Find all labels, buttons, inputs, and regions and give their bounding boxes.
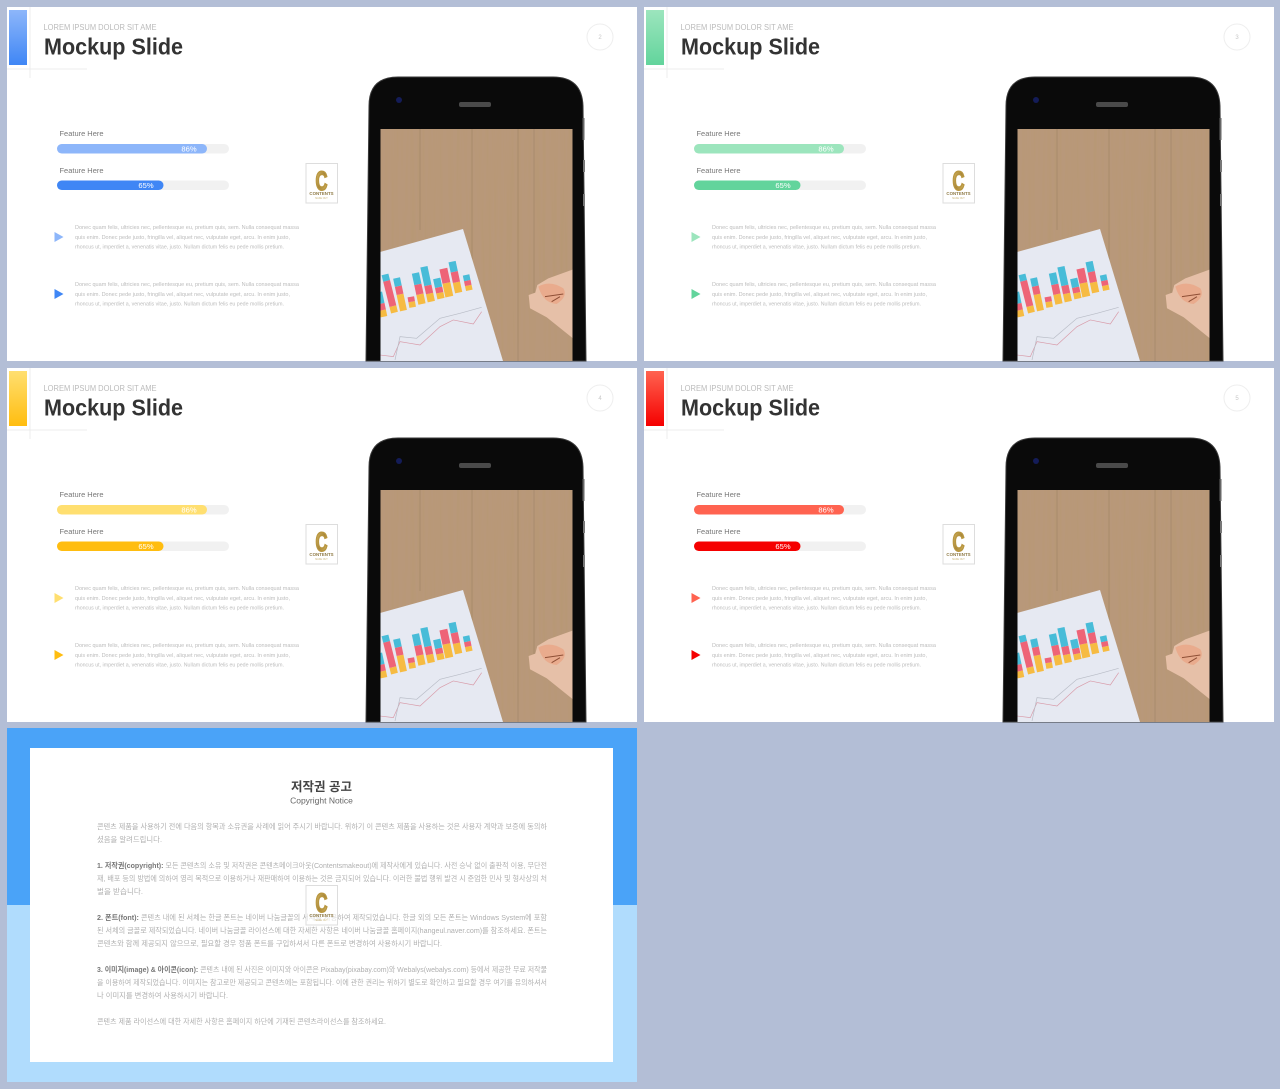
page number 3 [1224, 24, 1250, 50]
icon: triangle [692, 289, 700, 299]
progress bar 65%: Feature Here [696, 527, 740, 536]
progress bar 86%: Feature Here [60, 129, 104, 138]
text block 1: Donec quam felis, ultricies nec, pellentesque eu, pretium quis, sem. Nulla consequat massa [75, 225, 299, 231]
text block 1 [712, 225, 936, 250]
progress bar 86%: 86% [818, 506, 834, 514]
logo: C [952, 166, 964, 196]
phone mockup [366, 438, 586, 722]
heading: blue slide: LOREM IPSUM DOLOR SIT AME [44, 23, 156, 32]
phone mockup [366, 77, 586, 361]
page number 3: 3 [1235, 35, 1239, 41]
panel: yellow mockup slide [7, 368, 637, 722]
text block 1: Donec quam felis, ultricies nec, pellentesque eu, pretium quis, sem. Nulla consequat massa [712, 225, 936, 231]
text block 2: Donec quam felis, ultricies nec, pellentesque eu, pretium quis, sem. Nulla consequat massa [712, 643, 936, 649]
phone mockup [1003, 438, 1223, 722]
accent block: green [646, 10, 664, 65]
accent block: blue [9, 10, 27, 65]
text block 1: quis enim. Donec pede justo, fringilla vel, aliquet nec, vulputate eget, arcu. In enim justo, [712, 596, 927, 602]
progress bar 65% [694, 166, 866, 190]
progress bar 86%: 86% [181, 506, 197, 514]
logo: CONTENTS [309, 191, 334, 196]
heading: copyright: Copyright Notice [290, 796, 353, 806]
text block 2: rhoncus ut, imperdiet a, venenatis vitae, justo. Nullam dictum felis eu pede mollis pretium. [75, 302, 284, 308]
heading: blue slide [44, 23, 183, 60]
progress bar 65% [57, 527, 229, 551]
page number 4 [587, 385, 613, 411]
paragraph: font: 콘텐츠와 함께 제공되지 않으므로, 필요할 경우 정품 폰트를 구입하셔서 다른 폰트로 변경하여 사용하시기 바랍니다. [97, 938, 442, 948]
text block 2: Donec quam felis, ultricies nec, pellentesque eu, pretium quis, sem. Nulla consequat massa [75, 643, 299, 649]
progress bar 86% [694, 490, 866, 514]
panel: red mockup slide [644, 368, 1274, 722]
progress bar 86% [57, 490, 229, 514]
icon: triangle [54, 650, 64, 660]
paragraph: image and icon: 나 이미지를 변경하여 사용하시기 바랍니다. [97, 990, 228, 1000]
logo overlay: CONTENTS [309, 913, 334, 918]
progress bar 65%: 65% [775, 542, 791, 551]
progress bar 65%: Feature Here [696, 166, 740, 175]
heading: green slide: Mockup Slide [681, 34, 820, 60]
text block 1 [712, 586, 936, 612]
intro paragraph [97, 821, 547, 844]
text block 2: quis enim. Donec pede justo, fringilla vel, aliquet nec, vulputate eget, arcu. In enim justo, [712, 292, 927, 298]
heading: yellow slide [44, 384, 183, 420]
text block 1: rhoncus ut, imperdiet a, venenatis vitae, justo. Nullam dictum felis eu pede mollis pretium. [712, 606, 921, 612]
accent block: red [646, 371, 664, 426]
paragraph: font: 된 서체의 글꼴로 제작되었습니다. 네이버 나눔글꼴 라이선스에 대한 자세한 사항은 네이버 나눔글꼴 홈페이지(hangeul.naver.com)를 참조하세요. 폰트는 [97, 925, 547, 935]
paragraph: image and icon [97, 964, 547, 1000]
heading: red slide: LOREM IPSUM DOLOR SIT AME [680, 384, 794, 393]
progress bar 65% [694, 527, 866, 551]
logo: C [316, 527, 328, 557]
heading: red slide: Mockup Slide [681, 394, 820, 420]
page number 5: 5 [1235, 396, 1239, 402]
text block 2: rhoncus ut, imperdiet a, venenatis vitae, justo. Nullam dictum felis eu pede mollis pretium. [712, 302, 921, 308]
progress bar 65% [57, 166, 229, 190]
text block 1: rhoncus ut, imperdiet a, venenatis vitae, justo. Nullam dictum felis eu pede mollis pretium. [712, 244, 921, 250]
text block 2: Donec quam felis, ultricies nec, pellentesque eu, pretium quis, sem. Nulla consequat massa [75, 282, 299, 288]
logo overlay [306, 886, 338, 925]
logo: MAKE OUT [952, 197, 965, 200]
icon: triangle [54, 593, 64, 603]
page number 5 [1224, 385, 1250, 411]
logo: CONTENTS [946, 552, 971, 557]
text block 1 [75, 225, 299, 250]
paragraph: copyright: 벌을 받습니다. [97, 886, 143, 896]
text block 1: Donec quam felis, ultricies nec, pellentesque eu, pretium quis, sem. Nulla consequat massa [75, 586, 299, 592]
heading: blue slide: Mockup Slide [44, 34, 183, 60]
text block 2: rhoncus ut, imperdiet a, venenatis vitae, justo. Nullam dictum felis eu pede mollis pretium. [75, 662, 284, 668]
logo: CONTENTS [946, 191, 971, 196]
progress bar 65%: 65% [775, 181, 791, 190]
closing line: 콘텐츠 제품 라이선스에 대한 자세한 사항은 홈페이지 하단에 기재된 콘텐츠라이선스를 참조하세요. [97, 1016, 386, 1026]
logo: CONTENTS [309, 552, 334, 557]
text block 2 [75, 282, 299, 308]
heading: copyright: 저작권 공고 [291, 779, 352, 794]
text block 1: quis enim. Donec pede justo, fringilla vel, aliquet nec, vulputate eget, arcu. In enim justo, [75, 596, 290, 602]
progress bar 86%: Feature Here [696, 490, 740, 499]
logo [306, 164, 338, 203]
icon: triangle [54, 289, 64, 299]
progress bar 86%: 86% [181, 144, 197, 154]
text block 2 [75, 643, 299, 668]
logo [943, 524, 974, 564]
progress bar 65%: Feature Here [60, 166, 104, 175]
text block 2: quis enim. Donec pede justo, fringilla vel, aliquet nec, vulputate eget, arcu. In enim justo, [712, 653, 927, 659]
logo: MAKE OUT [315, 197, 328, 200]
heading: red slide [680, 384, 820, 420]
panel: green mockup slide [644, 7, 1274, 361]
heading: green slide [680, 23, 820, 60]
paragraph: image and icon: 을 이용하여 제작되었습니다. 이미지는 참고로만 제공되고 콘텐츠에는 포함됩니다. 이에 관한 권리는 위하기 별도로 확인하고 필요할 경우 여기를 유의하셔서 [97, 977, 547, 987]
heading: yellow slide: Mockup Slide [44, 394, 183, 420]
text block 1: Donec quam felis, ultricies nec, pellentesque eu, pretium quis, sem. Nulla consequat massa [712, 586, 936, 592]
icon: triangle [692, 650, 700, 660]
progress bar 65%: 65% [138, 542, 154, 551]
paragraph: font [97, 912, 547, 948]
panel: blue mockup slide [7, 7, 637, 361]
phone mockup [1003, 77, 1223, 361]
page number 4: 4 [598, 396, 602, 402]
panel: copyright notice [7, 728, 637, 1082]
logo: C [316, 166, 328, 196]
logo [306, 524, 338, 564]
icon: triangle [692, 593, 700, 603]
text block 1: quis enim. Donec pede justo, fringilla vel, aliquet nec, vulputate eget, arcu. In enim justo, [75, 235, 290, 241]
logo overlay: MAKE OUT [315, 919, 328, 922]
progress bar 86% [694, 129, 866, 154]
text block 2 [712, 282, 936, 308]
paragraph: image and icon: 3. 이미지(image) & 아이콘(icon): 콘텐츠 내에 된 사진은 이미지와 아이콘은 Pixabay(pixabay.com)와 Webalys(webalys.com) 등에서 제공한 무료 저작물 [97, 964, 547, 974]
text block 1: rhoncus ut, imperdiet a, venenatis vitae, justo. Nullam dictum felis eu pede mollis pretium. [75, 244, 284, 250]
heading: yellow slide: LOREM IPSUM DOLOR SIT AME [44, 384, 156, 393]
intro paragraph: 콘텐츠 제품을 사용하기 전에 다음의 항목과 소유권을 사례에 읽어 주시기 바랍니다. 위하기 이 콘텐츠 제품을 사용하는 것은 사용자 계약과 보증에 동의하 [97, 821, 547, 831]
logo overlay: C [316, 888, 328, 918]
progress bar 65%: 65% [138, 181, 154, 190]
progress bar 86%: 86% [818, 144, 834, 154]
heading: copyright [290, 779, 353, 806]
heading: green slide: LOREM IPSUM DOLOR SIT AME [680, 23, 794, 32]
progress bar 86% [57, 129, 229, 154]
icon: triangle [54, 232, 64, 242]
icon: triangle [692, 232, 700, 242]
intro paragraph: 셨음을 알려드립니다. [97, 834, 162, 844]
paragraph: font: 2. 폰트(font): 콘텐츠 내에 된 서체는 한글 폰트는 네이버 나눔글꼴의 서체를 사용하여 제작되었습니다. 한글 외의 모든 폰트는 Windows System에 포함 [97, 912, 547, 922]
logo: MAKE OUT [315, 558, 328, 561]
text block 2: quis enim. Donec pede justo, fringilla vel, aliquet nec, vulputate eget, arcu. In enim justo, [75, 653, 290, 659]
paragraph: copyright: 재, 배포 등의 방법에 의하여 영리 목적으로 이용하거나 재판매하여 이용하는 것은 금지되어 있습니다. 이러한 불법 행위 발견 시 준엄한 민사 및 형사상의 처 [97, 873, 547, 883]
page number 2 [587, 24, 613, 50]
text block 2: Donec quam felis, ultricies nec, pellentesque eu, pretium quis, sem. Nulla consequat massa [712, 282, 936, 288]
text block 1: quis enim. Donec pede justo, fringilla vel, aliquet nec, vulputate eget, arcu. In enim justo, [712, 235, 927, 241]
logo [943, 164, 974, 203]
progress bar 65%: Feature Here [60, 527, 104, 536]
text block 2: quis enim. Donec pede justo, fringilla vel, aliquet nec, vulputate eget, arcu. In enim justo, [75, 292, 290, 298]
logo: C [952, 527, 964, 557]
text block 1: rhoncus ut, imperdiet a, venenatis vitae, justo. Nullam dictum felis eu pede mollis pretium. [75, 606, 284, 612]
page number 2: 2 [598, 35, 602, 41]
paragraph: copyright [97, 860, 547, 896]
text block 1 [75, 586, 299, 612]
logo: MAKE OUT [952, 558, 965, 561]
accent block: yellow [9, 371, 27, 426]
text block 2: rhoncus ut, imperdiet a, venenatis vitae, justo. Nullam dictum felis eu pede mollis pretium. [712, 662, 921, 668]
progress bar 86%: Feature Here [696, 129, 740, 138]
text block 2 [712, 643, 936, 668]
progress bar 86%: Feature Here [60, 490, 104, 499]
paragraph: copyright: 1. 저작권(copyright): 모든 콘텐츠의 소유 및 저작권은 콘텐츠메이크아웃(Contentsmakeout)에 제작사에게 있습니다. 사전 승낙 없이 출판적 이용, 무단전 [97, 860, 547, 870]
